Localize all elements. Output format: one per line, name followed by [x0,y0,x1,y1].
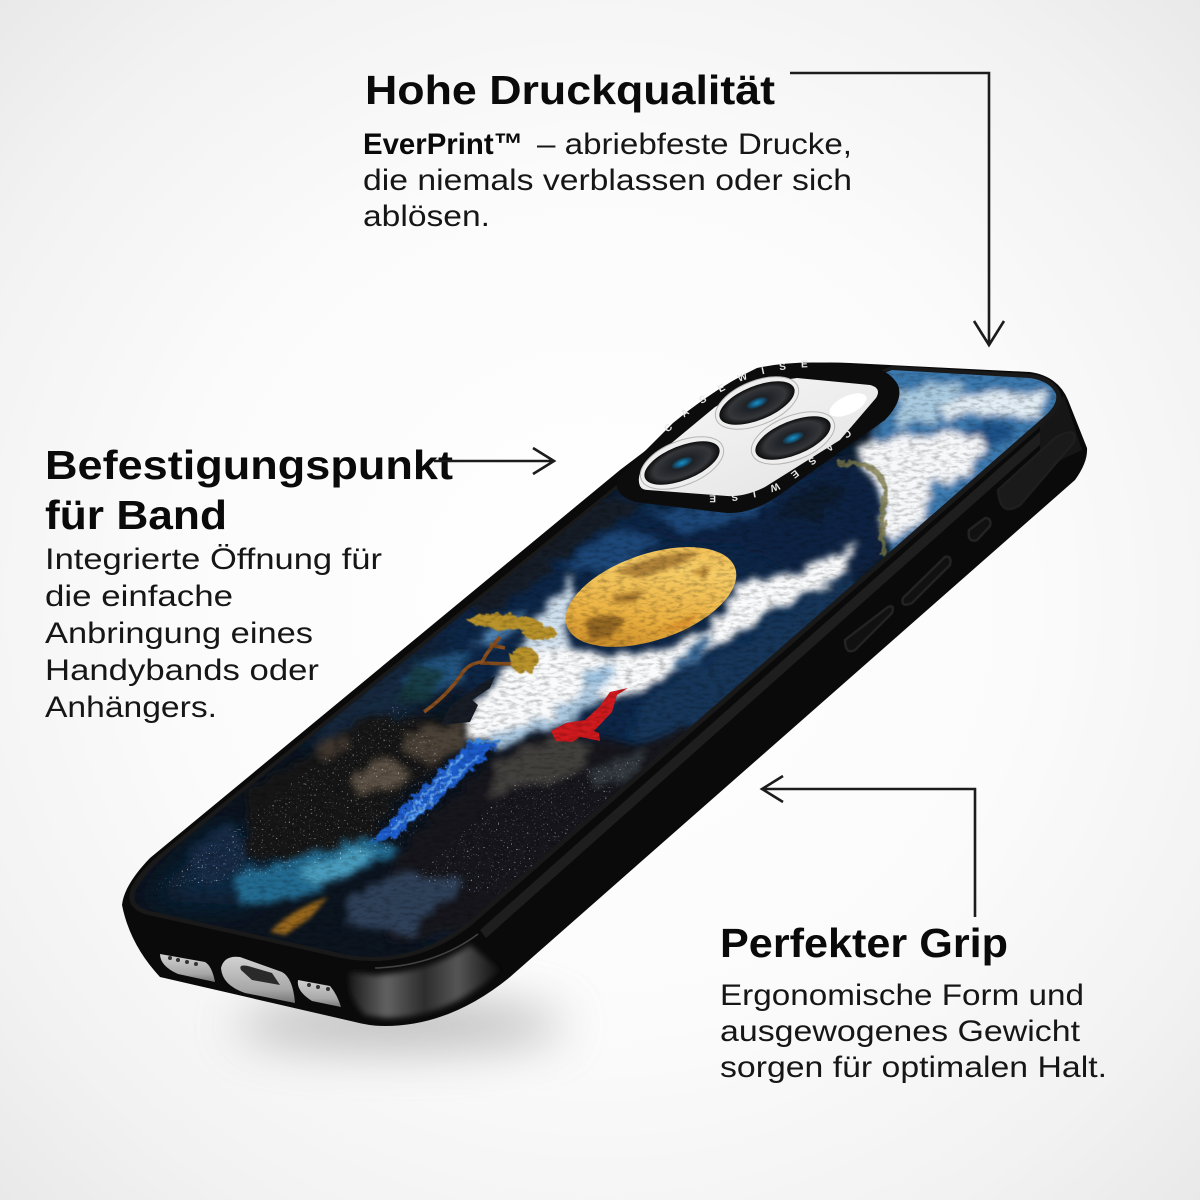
artwork [134,370,1056,957]
moon [566,547,736,647]
central white mist [400,540,860,748]
dark tree left [396,665,445,702]
brand text top: CASEWISE [664,360,808,432]
sky and clouds [852,370,1056,554]
heading: Perfekter Grip [720,920,1008,966]
heading: Befestigungspunkt [45,442,453,488]
body text: Anhängers. [45,691,217,724]
body text: – abriebfeste Drucke, [537,128,852,161]
body text: die einfache [45,580,233,613]
camera ring [617,363,899,513]
heading [45,442,453,538]
arrow: grip [762,776,975,917]
waterfall [366,741,500,846]
left rock and brown cliff [240,715,470,860]
body text: Anbringung eines [45,617,313,650]
speaker left [160,954,215,982]
lens: right [744,401,842,475]
body text: Handybands oder [45,654,319,687]
body text: sorgen für optimalen Halt. [720,1051,1107,1084]
right blue foothills [582,575,860,750]
foliage [467,611,557,673]
callout: grip [720,920,1107,1084]
body text: ablösen. [363,200,490,233]
paint grain [153,372,1056,950]
art base [134,430,871,957]
trunk [424,637,512,712]
heading: Hohe Druckqualität [365,67,775,113]
arrow: print quality [790,73,1004,345]
body text [363,128,852,233]
tree [396,611,557,712]
brand text bottom: CASEWISE [710,430,851,502]
dark figure [440,676,495,725]
speaker right [298,980,341,1007]
orange detail [270,897,328,935]
dark cliff [470,460,880,620]
body text: Ergonomische Form und [720,979,1084,1012]
heading: für Band [45,492,227,538]
body text: die niemals verblassen oder sich [363,164,852,197]
lens: top [708,366,806,440]
camera module [617,360,900,513]
screen rim [129,366,1061,961]
case body [122,362,1087,1026]
body text: Integrierte Öffnung für [45,543,382,576]
callout: print quality [363,67,852,233]
arrow: strap attachment [434,448,554,474]
body text: EverPrint™ [363,128,523,161]
corner highlight [349,945,500,1018]
red figure [551,688,628,742]
phone case [122,360,1088,1026]
side buttons [845,432,1075,651]
soft colour fields [150,450,880,945]
camera window [639,378,878,496]
charging port [221,957,295,1003]
lower water and pool [185,820,465,935]
side shading [349,395,1082,1018]
right dark rock [390,725,700,945]
star specks [150,700,640,900]
body text: ausgewogenes Gewicht [720,1015,1081,1048]
callout: strap attachment [45,442,453,724]
body text [720,979,1107,1084]
lens: left [633,426,731,500]
flash [826,388,870,422]
phone shadow [235,1001,565,1049]
body text [45,543,382,724]
foliage on cliff edge [838,463,886,556]
